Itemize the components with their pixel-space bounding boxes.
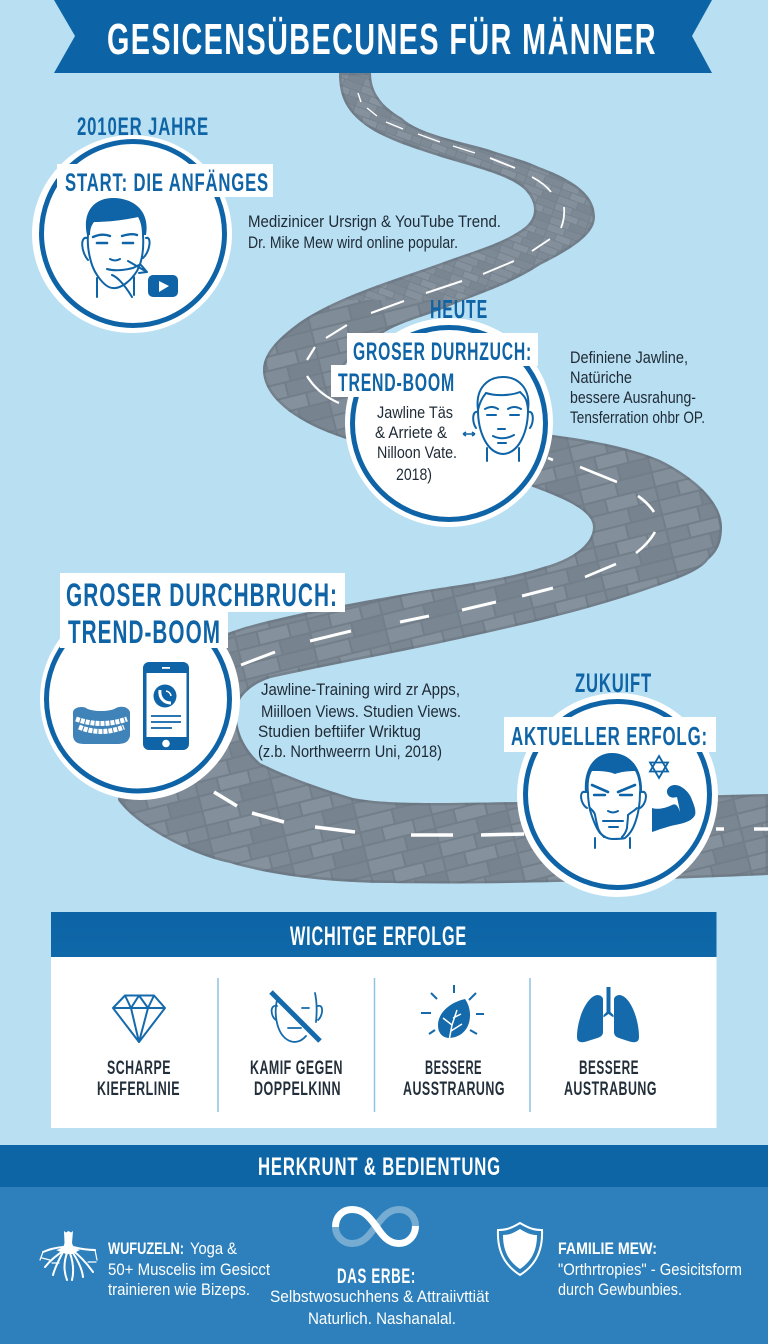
icon: teeth <box>73 707 130 744</box>
text: wurzeln: WUFUZELN: <box>108 1239 184 1258</box>
item 4 text <box>564 1058 657 1100</box>
icon: shield <box>498 1223 542 1275</box>
text: wurzeln: Yoga & <box>190 1239 238 1258</box>
circle text: Nilloon Vate. <box>377 443 457 462</box>
circle <box>40 598 240 800</box>
description 2: Tensferration ohbr OP. <box>570 408 705 427</box>
panel header <box>51 912 716 957</box>
text: das erbe <box>270 1265 489 1328</box>
text: wurzeln: 50+ Muscelis im Gesicct <box>108 1260 270 1279</box>
icon: phone <box>143 662 189 750</box>
circle text: 2018) <box>396 465 432 484</box>
panel: wichtige erfolge <box>51 912 716 1128</box>
milestone 1: start <box>32 113 273 333</box>
milestone 2: heute <box>331 294 553 527</box>
item 2 text <box>250 1058 343 1100</box>
description 1 <box>248 212 501 252</box>
circle <box>32 135 232 333</box>
item 3 text: AUSSTRARUNG <box>403 1079 505 1100</box>
description 3: (z.b. Northweerrn Uni, 2018) <box>258 742 442 761</box>
circle <box>345 318 553 527</box>
text: das erbe: Selbstwosuchhens & Attraiivttiät <box>270 1287 489 1306</box>
icon: leaf with rays <box>421 985 484 1046</box>
icon: lungs <box>577 987 639 1042</box>
item 4 text: AUSTRABUNG <box>564 1079 657 1100</box>
heading: TREND-BOOM <box>68 614 221 650</box>
heading: TREND-BOOM <box>338 369 455 397</box>
description 2: bessere Ausrahung- <box>570 388 696 407</box>
description 2 <box>570 348 705 427</box>
icon: star <box>650 756 668 778</box>
text: familie mew <box>558 1239 742 1299</box>
text: familie mew: "Orthrtropies" - Gesicitsform <box>558 1260 742 1279</box>
heading <box>504 717 716 752</box>
icon: flexed arm <box>652 785 695 832</box>
icon: video play <box>148 275 178 297</box>
icon: face with arrows <box>82 198 150 297</box>
description 1: Dr. Mike Mew wird online popular. <box>248 233 458 252</box>
item 4 text: BESSERE <box>579 1058 639 1079</box>
description 3: Jawline-Training wird zr Apps, <box>261 680 460 699</box>
icon: infinity <box>336 1210 416 1244</box>
heading: GROSER DURCHBRUCH: <box>66 577 338 613</box>
description 3: Studien beftiifer Wriktug <box>258 722 421 741</box>
panel: herkunft <box>0 1145 768 1344</box>
description 2: Natüriche <box>570 368 632 387</box>
item 2 text: DOPPELKINN <box>254 1079 341 1100</box>
panel header <box>0 1145 768 1187</box>
item 3 text <box>403 1058 505 1100</box>
winding road <box>118 73 768 884</box>
text: familie mew: durch Gewbunbies. <box>558 1280 682 1299</box>
item 2 text: KAMIF GEGEN <box>250 1058 343 1079</box>
era label: 2010ER JAHRE <box>77 113 209 141</box>
circle text <box>375 403 457 484</box>
item 1 text: SCHARPE <box>107 1058 171 1079</box>
heading <box>60 573 345 650</box>
heading: START: DIE ANFÄNGES <box>65 169 269 197</box>
heading <box>331 333 538 397</box>
title banner <box>54 0 712 73</box>
icon: arrow <box>463 432 475 436</box>
heading <box>57 164 273 197</box>
circle <box>517 693 718 897</box>
description 3 <box>258 680 461 761</box>
milestone 3: trend boom <box>40 573 345 800</box>
milestone 4: zukunft <box>504 668 718 897</box>
icon: roots <box>40 1231 97 1280</box>
text: das erbe: Naturlich. Nashanalal. <box>308 1309 456 1328</box>
item 1 text <box>97 1058 180 1100</box>
panel header: WICHITGE ERFOLGE <box>290 921 467 951</box>
circle text: & Arriete & <box>375 423 448 442</box>
icon: face <box>581 753 646 848</box>
heading: GROSER DURHZUCH: <box>353 338 532 366</box>
item 3 text: BESSERE <box>425 1058 482 1079</box>
icon: diamond <box>113 996 165 1042</box>
text: wurzeln <box>108 1239 270 1299</box>
panel header: HERKRUNT & BEDIENTUNG <box>258 1153 501 1181</box>
description 3: Miilloen Views. Studien Views. <box>261 702 461 721</box>
text: wurzeln: trainieren wie Bizeps. <box>108 1280 250 1299</box>
era label: ZUKUIFT <box>575 668 652 698</box>
era label: HEUTE <box>430 294 488 324</box>
description 2: Definiene Jawline, <box>570 348 688 367</box>
icon: face crossed out <box>271 992 322 1042</box>
item 1 text: KIEFERLINIE <box>97 1079 180 1100</box>
circle text: Jawline Täs <box>377 403 453 422</box>
text: das erbe: DAS ERBE: <box>337 1265 416 1288</box>
text: familie mew: FAMILIE MEW: <box>558 1239 657 1258</box>
icon: face outline <box>473 377 533 461</box>
description 1: Medizinicer Ursrign & YouTube Trend. <box>248 212 501 231</box>
